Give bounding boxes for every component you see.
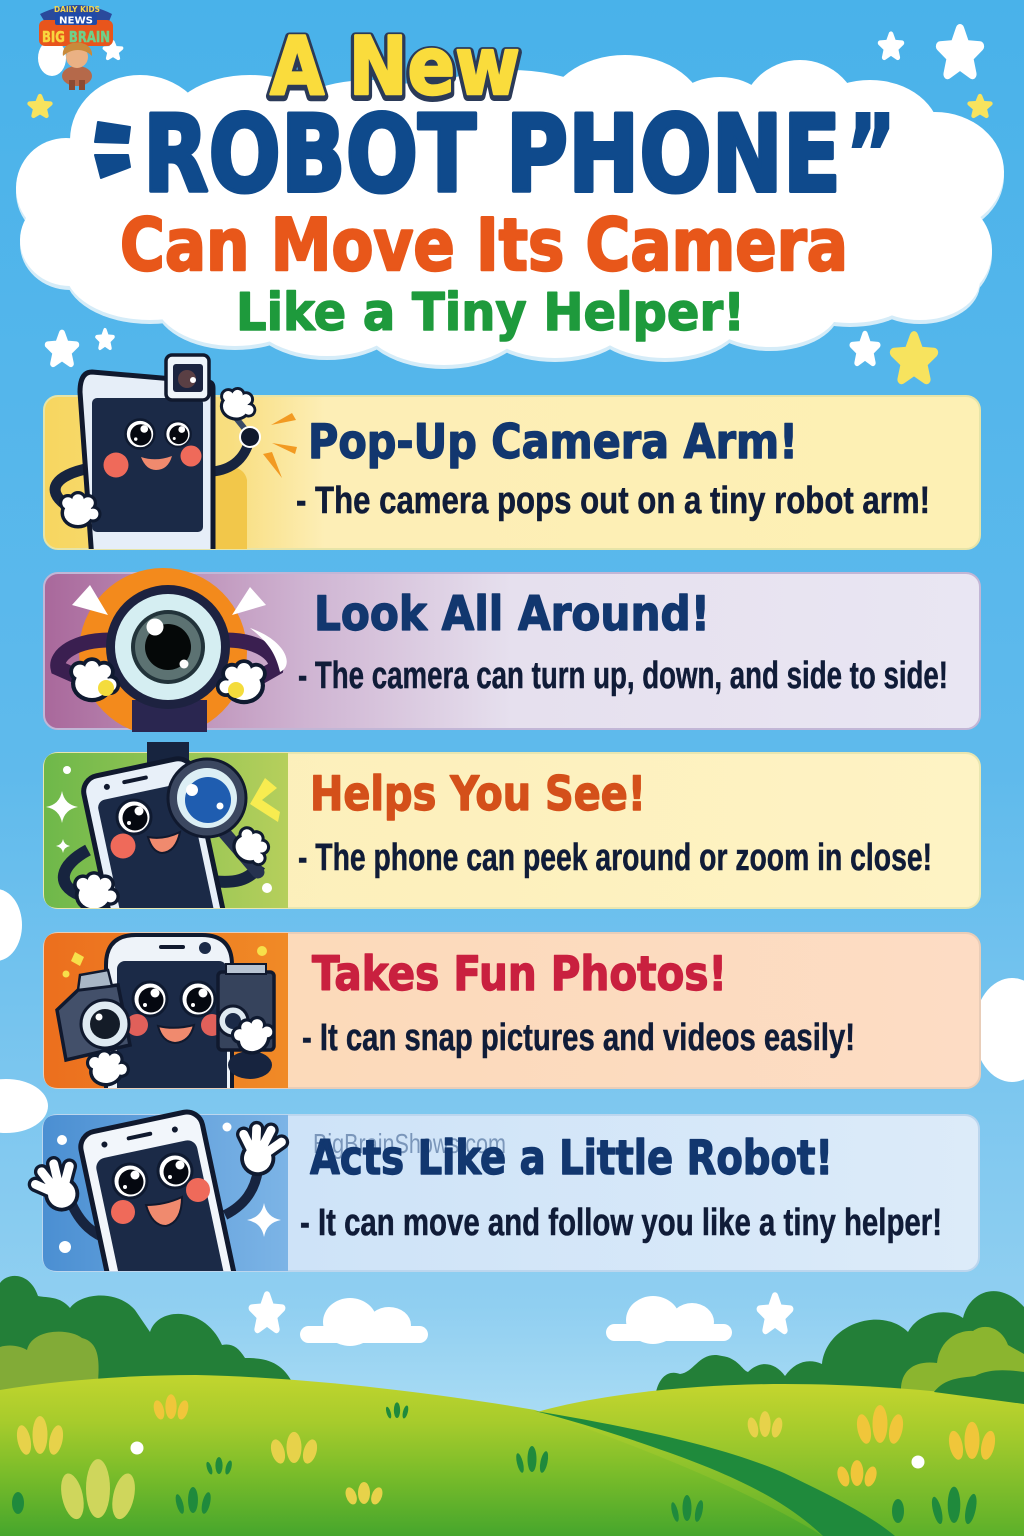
panel: helps you see — [43, 742, 981, 909]
title cloud — [16, 55, 1004, 369]
panel: look all around — [44, 568, 980, 736]
dark bush in front right — [934, 1370, 1024, 1404]
logo: Daily Kids News Big Brain — [38, 5, 122, 90]
icon: waving phone — [28, 1110, 290, 1271]
winding path — [535, 1411, 895, 1536]
panel: pop-up camera arm — [44, 355, 980, 560]
logo: Daily Kids News Big Brain: NEWS — [59, 16, 93, 26]
small cloud right — [606, 1296, 732, 1344]
panel: acts like a little robot — [28, 1110, 980, 1272]
panel: takes fun photos — [44, 933, 980, 1101]
icon: phone with camera arm — [55, 355, 297, 560]
icon: phone with two cameras — [57, 935, 282, 1101]
light bush left — [0, 1332, 99, 1394]
title line: Can Move Its Camera: Can Move Its Camera — [120, 203, 848, 287]
grass tufts — [12, 1394, 997, 1525]
left quote mark — [95, 122, 130, 178]
title line: A New: A New — [270, 20, 520, 113]
icon: phone with magnifying glass — [46, 742, 280, 908]
left hill — [0, 1375, 823, 1536]
right hill — [530, 1384, 1024, 1536]
logo: Daily Kids News Big Brain: DAILY KIDS — [54, 5, 100, 14]
heading: Look All Around! — [314, 587, 710, 642]
side clouds — [0, 889, 1024, 1133]
bushes left — [0, 1276, 292, 1400]
landscape — [0, 1276, 1024, 1536]
icon: camera eye with arms — [58, 568, 287, 736]
bushes right — [656, 1291, 1024, 1420]
title line: A New: A New — [270, 22, 520, 115]
lower stars — [252, 1295, 790, 1330]
heading: Pop-Up Camera Arm! — [308, 415, 798, 470]
decorative stars — [30, 29, 990, 379]
light bush right — [901, 1327, 1024, 1410]
heading: Acts Like a Little Robot! — [310, 1131, 833, 1186]
small cloud left — [300, 1298, 428, 1346]
title — [95, 20, 896, 343]
logo: Daily Kids News Big Brain: BIG BRAIN — [42, 28, 110, 46]
heading: Takes Fun Photos! — [312, 947, 727, 1002]
right quote mark: ” — [846, 93, 896, 216]
description: - It can snap pictures and videos easily! — [302, 1017, 855, 1059]
watermark: BigBrainShows.com — [313, 1128, 506, 1159]
title line: Like a Tiny Helper: Like a Tiny Helper! — [236, 283, 745, 343]
heading: Helps You See! — [310, 767, 646, 822]
title line: ROBOT PHONE: ROBOT PHONE — [143, 93, 841, 216]
